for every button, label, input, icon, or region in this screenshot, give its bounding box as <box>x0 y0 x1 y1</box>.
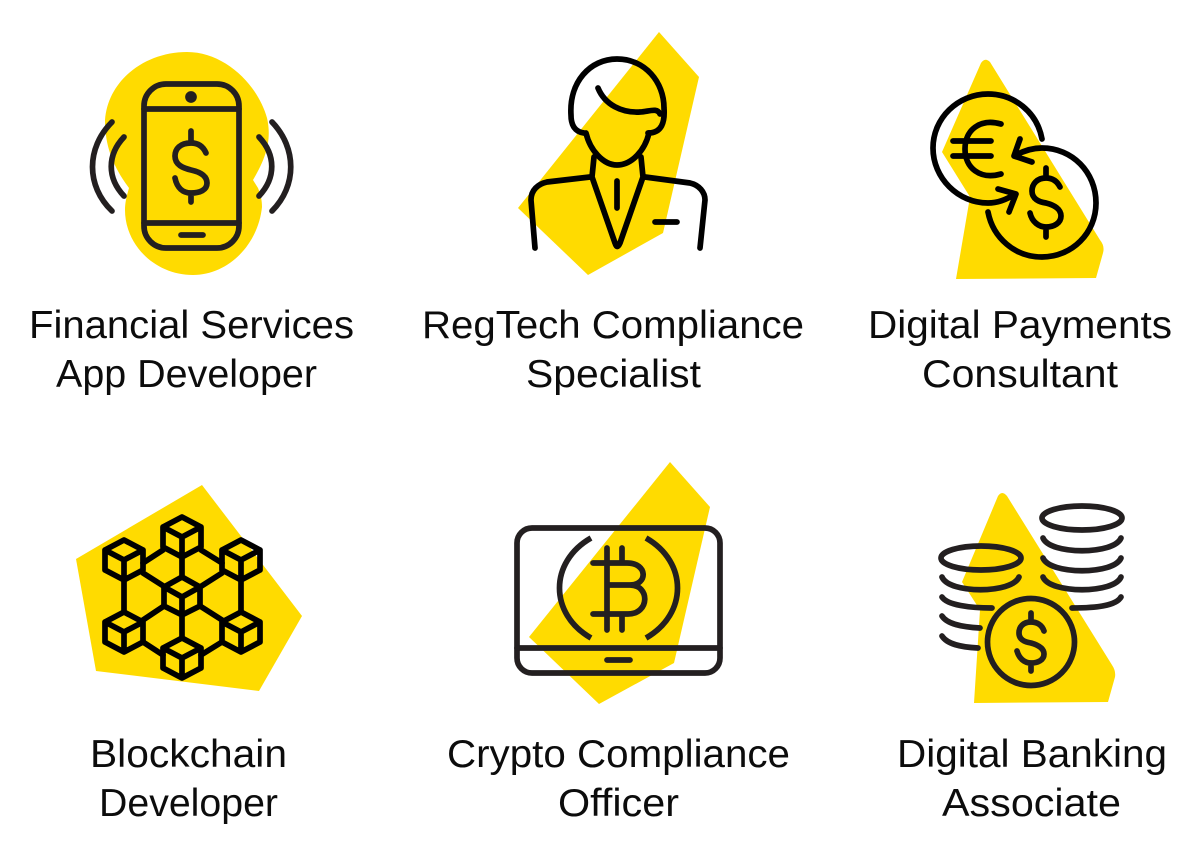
icon: blockchain cube network <box>105 517 260 678</box>
icon: coin stacks and dollar coin <box>941 506 1122 686</box>
label: Crypto Compliance <box>447 733 790 776</box>
label: Consultant <box>922 353 1118 396</box>
label: Digital Banking <box>897 733 1167 776</box>
label: Developer <box>99 782 278 825</box>
panel: RegTech Compliance Specialist <box>422 32 804 396</box>
icon: vibration waves <box>92 122 291 211</box>
label <box>29 304 354 396</box>
label <box>868 304 1172 396</box>
label <box>897 733 1167 825</box>
yellow blob behind phone <box>105 52 269 275</box>
label: App Developer <box>56 353 317 396</box>
panel: Financial Services App Developer <box>29 52 354 396</box>
label: RegTech Compliance <box>422 304 804 347</box>
label: Officer <box>558 782 679 825</box>
icon: person in suit <box>531 59 705 248</box>
panel: Blockchain Developer <box>76 485 302 825</box>
yellow polygon behind coins <box>942 60 1104 279</box>
label <box>422 304 804 396</box>
label: Financial Services <box>29 304 354 347</box>
yellow polygon behind person <box>518 32 699 275</box>
yellow polygon behind coin stacks <box>962 493 1115 703</box>
panel: Digital Payments Consultant <box>868 60 1172 396</box>
label: Associate <box>942 782 1121 825</box>
yellow polygon behind laptop <box>529 462 710 704</box>
panel: Digital Banking Associate <box>897 493 1167 825</box>
label: Blockchain <box>90 733 287 776</box>
label: Specialist <box>526 353 701 396</box>
icon: screen with bitcoin <box>517 528 720 673</box>
yellow polygon behind blocks <box>76 485 302 691</box>
label <box>90 733 287 825</box>
label: Digital Payments <box>868 304 1172 347</box>
label <box>447 733 790 825</box>
icon: smartphone with dollar sign <box>144 84 239 248</box>
icon: euro and dollar exchange <box>933 94 1096 257</box>
panel: Crypto Compliance Officer <box>447 462 790 825</box>
